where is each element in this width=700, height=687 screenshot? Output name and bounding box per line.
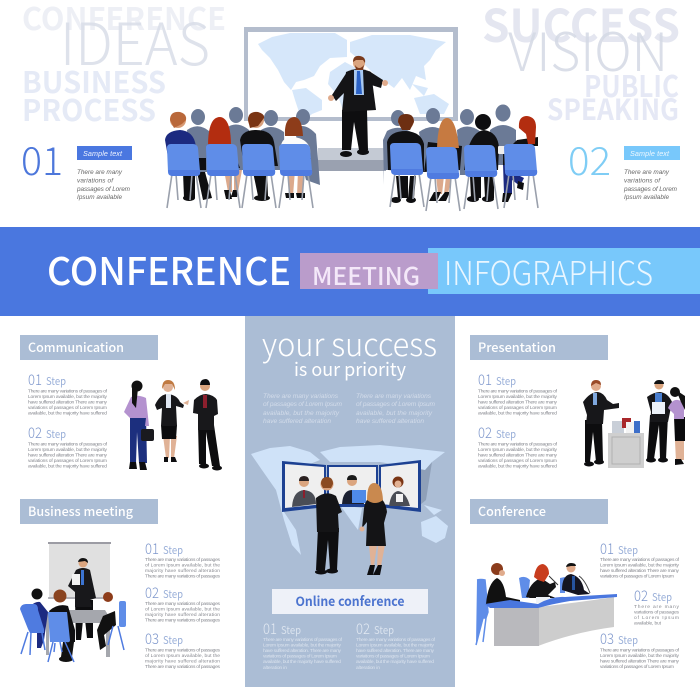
chairs back panel [519, 577, 565, 598]
presentation figures [583, 380, 685, 468]
communication step 02: available, but the majority have suffered [28, 464, 107, 470]
center heading: your success [262, 320, 437, 366]
panelist woman 1 [486, 563, 520, 607]
communication step 02: There are many variations of passages of [28, 442, 108, 448]
communication step 02 [28, 422, 108, 470]
background words right: VISION [508, 11, 668, 87]
heading: communication: Communication [28, 337, 124, 356]
center text columns [263, 393, 436, 425]
center panel background [245, 316, 455, 687]
communication step 01 [28, 369, 108, 416]
banner: INFOGRAPHICS [444, 247, 653, 295]
woman in purple [124, 380, 154, 470]
audience left [165, 107, 320, 208]
center step 01: available, but the majority have suffered [263, 659, 341, 665]
conference step 01: 01 [600, 538, 614, 559]
heading: conference: Conference [478, 501, 546, 520]
center step 02: variations of passages of Lorem Ipsum [356, 654, 430, 660]
center text columns: have suffered alteration [263, 418, 331, 425]
audience right [383, 104, 538, 211]
background words left [22, 0, 226, 130]
stage [318, 148, 386, 171]
presentation step 01: Lorem Ipsum available, but the majority [478, 394, 558, 400]
conference step 01: Lorem Ipsum available, but the majority [600, 562, 680, 568]
background words left: IDEAS [60, 0, 210, 82]
center step 01: have suffered alteration. There are many [263, 648, 342, 654]
presentation step 01 [478, 369, 558, 416]
table with books [608, 418, 644, 468]
meeting table [38, 610, 113, 657]
presentation step 02: There are many variations of passages of [478, 442, 558, 448]
speaker middle screen [342, 475, 366, 504]
callout 02: variations of [624, 178, 661, 184]
panelist man [562, 563, 590, 595]
callout 02 [568, 131, 680, 201]
callout 02: Ipsum available [624, 194, 669, 201]
conference step 03: 03 [600, 628, 614, 649]
speaker right screen [389, 476, 410, 506]
center world map [251, 445, 448, 555]
conference step 02 [634, 585, 680, 626]
center step 01: Step [281, 623, 301, 638]
man in black suit [193, 379, 222, 470]
business meeting step 01: There are many variations of passages [145, 557, 221, 563]
man with paper [646, 380, 672, 462]
presentation step 01: Step [496, 374, 516, 389]
center text columns: There are many variations [263, 393, 339, 400]
presentation step 02: available, but the majority have suffered [478, 464, 557, 470]
callout 02: Sample text [630, 149, 670, 158]
center step 02 [356, 618, 436, 671]
communication figures [124, 379, 222, 470]
presentation step 02 [478, 422, 558, 470]
background words right: SPEAKING [547, 87, 679, 129]
heading: presentation [470, 335, 608, 360]
callout 01 [21, 131, 132, 201]
presentation step 01: variations of passages of Lorem Ipsum [478, 405, 557, 411]
background words left: BUSINESS [22, 58, 166, 102]
presentation step 02: variations of passages of Lorem Ipsum [478, 458, 557, 464]
communication step 01: have suffered alteration There are many [28, 400, 108, 406]
callout 01: variations of [77, 178, 114, 184]
conference step 03: Lorem Ipsum available, but the majority [600, 653, 680, 659]
business meeting step 03: There are many variations of passages [145, 664, 221, 670]
business meeting step 03: There are many variations of passages [145, 648, 221, 654]
conference step 02: available, but [634, 620, 662, 626]
business meeting step 02: There are many variations of passages [145, 601, 221, 607]
center text columns: have suffered alteration [356, 418, 424, 425]
label: online conference: Online conference [296, 591, 404, 610]
center text columns: of passages of Lorem Ipsum [356, 401, 436, 408]
business meeting step 02: 02 [145, 582, 159, 603]
business meeting step 03: Step [163, 633, 183, 648]
center step 02: Lorem Ipsum available, but the majority [356, 642, 435, 648]
conference step 03: have suffered alteration There are many [600, 658, 680, 664]
chairs left [167, 144, 313, 208]
conference desk [485, 594, 617, 646]
communication step 02: variations of passages of Lorem Ipsum [28, 458, 107, 464]
communication step 02: Lorem Ipsum available, but the majority [28, 447, 108, 453]
business meeting figures [20, 542, 126, 662]
conference step 02: 02 [634, 585, 648, 606]
presentation step 02: have suffered alteration There are many [478, 452, 558, 458]
business meeting step 03: 03 [145, 628, 159, 649]
heading: business meeting [20, 499, 158, 524]
conference step 02: variations of passages [634, 610, 680, 616]
presentation step 02: Step [496, 427, 516, 442]
presentation board [48, 542, 111, 599]
callout 01: Sample text [83, 149, 123, 158]
conference step 02: Step [652, 590, 672, 605]
banner: CONFERENCE [47, 241, 291, 296]
man presenting [583, 380, 619, 466]
business meeting step 01 [145, 538, 221, 580]
center step 02: have suffered alteration. There are many [356, 648, 435, 654]
communication step 02: Step [46, 427, 66, 442]
communication step 01: Lorem Ipsum available, but the majority [28, 394, 108, 400]
communication step 01: variations of passages of Lorem Ipsum [28, 405, 107, 411]
presentation step 01: available, but the majority have suffered [478, 410, 557, 416]
heading: business meeting: Business meeting [28, 501, 134, 520]
heading: communication [20, 335, 158, 360]
communication step 01: available, but the majority have suffered [28, 410, 107, 416]
label: online conference [272, 589, 428, 614]
person 3 right [464, 114, 499, 202]
banner: MEETING [312, 258, 420, 293]
person 1 left [165, 112, 212, 201]
callout 01: Ipsum available [77, 194, 122, 201]
business meeting step 02: There are many variations of passages [145, 618, 221, 624]
conference step 01 [600, 538, 680, 580]
callout 01: There are many [77, 169, 123, 176]
person 1 right [387, 114, 424, 203]
conference step 01: have suffered alteration There are many [600, 568, 680, 574]
presentation step 01: There are many variations of passages of [478, 388, 558, 394]
silhouettes left [187, 107, 320, 185]
presentation step 01: 01 [478, 369, 492, 390]
center text columns: available, but the majority [356, 410, 433, 417]
person seated front [48, 590, 75, 662]
presentation step 01: have suffered alteration There are many [478, 400, 558, 406]
heading: presentation: Presentation [478, 337, 556, 356]
speaker left screen [292, 476, 316, 507]
center step 02: alteration in [356, 665, 380, 671]
conference step 02: of Lorem Ipsum [634, 615, 679, 621]
person 4 left [281, 117, 311, 198]
person 3 left [240, 112, 278, 201]
center step 01: alteration in [263, 665, 287, 671]
center text columns: There are many variations [356, 393, 432, 400]
center step 01: 01 [263, 618, 277, 639]
presenter [328, 56, 388, 157]
center step 02: There are many variations of passages of [356, 637, 436, 643]
conference step 03: There are many variations of passages of [600, 648, 680, 654]
person seated left back [20, 588, 48, 655]
man viewing screen [315, 477, 342, 574]
business meeting step 01: Step [163, 543, 183, 558]
center step 01: variations of passages of Lorem Ipsum [263, 654, 337, 660]
background words right: PUBLIC [584, 62, 679, 106]
center step 02: 02 [356, 618, 370, 639]
silhouettes right [383, 104, 516, 185]
conference step 01: There are many variations of passages of [600, 557, 680, 563]
background words right [482, 0, 680, 129]
business meeting step 01: majority have suffered alteration [145, 568, 220, 574]
video wall [282, 460, 421, 512]
communication step 01: 01 [28, 369, 42, 390]
business meeting step 02: Step [163, 587, 183, 602]
woman with documents [668, 387, 685, 465]
chair left panel [476, 580, 488, 645]
banner [0, 227, 700, 316]
business meeting step 02 [145, 582, 221, 624]
woman in black suit [155, 380, 189, 462]
callout 02: 02 [568, 131, 611, 187]
conference step 03: variations of passages of Lorem Ipsum [600, 664, 674, 670]
business meeting step 02: of Lorem Ipsum available, but the [145, 606, 220, 612]
conference figures [476, 563, 617, 646]
conference step 01: Step [618, 543, 638, 558]
communication step 02: 02 [28, 422, 42, 443]
background words left: PROCESS [22, 86, 156, 130]
business meeting step 03: of Lorem Ipsum available, but the [145, 653, 220, 659]
projection screen with world map [244, 27, 458, 121]
person seated right [97, 592, 126, 650]
business meeting step 01: 01 [145, 538, 159, 559]
callout 01: 01 [21, 131, 63, 187]
business meeting step 02: majority have suffered alteration [145, 612, 220, 618]
conference step 01: variations of passages of Lorem Ipsum [600, 574, 674, 580]
communication step 02: have suffered alteration There are many [28, 452, 108, 458]
business meeting step 03: majority have suffered alteration [145, 658, 220, 664]
conference step 02: There are many [634, 604, 680, 610]
presentation step 02: 02 [478, 422, 492, 443]
center text columns: available, but the majority [263, 410, 340, 417]
callout 02: There are many [624, 169, 670, 176]
center text columns: of passages of Lorem Ipsum [263, 401, 342, 408]
center step 02: available, but the majority have suffered [356, 659, 434, 665]
chairs right [390, 143, 538, 211]
standing speaker [68, 558, 96, 640]
business meeting step 03 [145, 628, 221, 670]
person 4 right [498, 116, 538, 202]
communication step 01: Step [46, 374, 66, 389]
business meeting step 01: of Lorem Ipsum available, but the [145, 562, 220, 568]
center step 01 [263, 618, 343, 671]
callout 01: passages of Lorem [76, 186, 131, 193]
communication step 01: There are many variations of passages of [28, 388, 108, 394]
conference step 03: Step [618, 633, 638, 648]
center step 02: Step [374, 623, 394, 638]
center step 01: Lorem Ipsum available, but the majority [263, 642, 342, 648]
center heading: is our priority [294, 356, 406, 382]
center step 01: There are many variations of passages of [263, 637, 343, 643]
woman viewing screen [360, 483, 387, 575]
presentation step 02: Lorem Ipsum available, but the majority [478, 447, 558, 453]
person 2 right [424, 118, 462, 201]
business meeting step 01: There are many variations of passages [145, 574, 221, 580]
heading: conference [470, 499, 608, 524]
person 2 left [207, 117, 242, 199]
conference step 03 [600, 628, 680, 670]
callout 02: passages of Lorem [623, 186, 678, 193]
panelist woman 2 [526, 564, 558, 603]
